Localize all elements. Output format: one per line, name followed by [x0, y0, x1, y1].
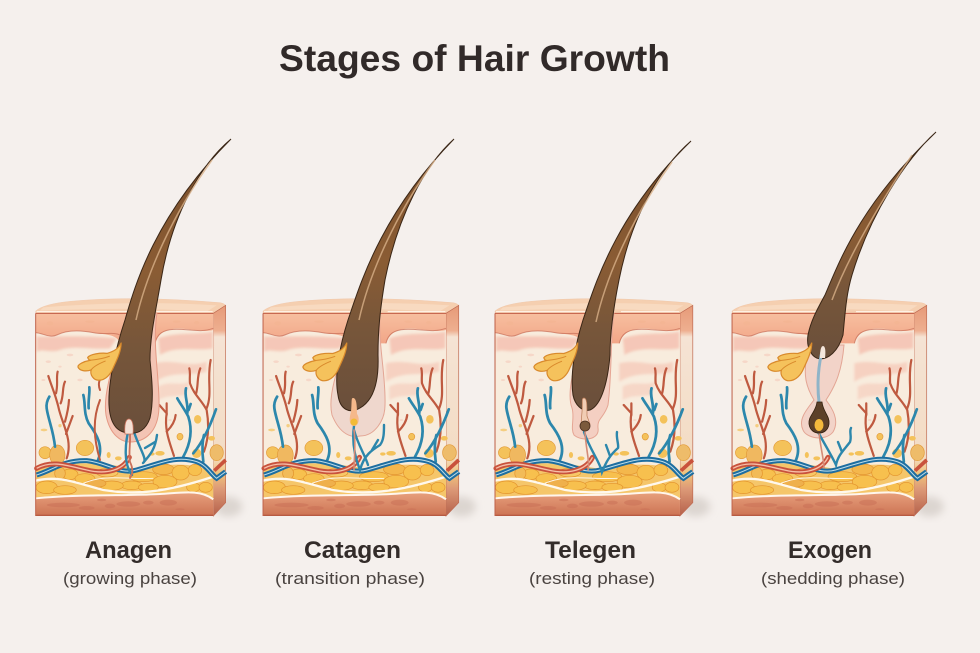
thread notch: Exogen: [820, 346, 825, 358]
sebaceous gland: Telegen: [534, 343, 578, 381]
papilla: Catagen: [350, 398, 359, 426]
skin cross-section: Catagen: [263, 299, 476, 517]
hair shaft: Anagen: [109, 139, 231, 433]
label: Catagen: (transition phase): [275, 569, 425, 588]
label: Exogen: (shedding phase): [761, 569, 905, 588]
hair shaft: Catagen: [337, 139, 454, 411]
detached thread: Exogen: [818, 348, 823, 402]
panel: Catagen: [263, 139, 476, 517]
panel: Anagen: [36, 139, 242, 517]
skin cross-section: Telegen: [495, 299, 710, 517]
papilla core: Exogen: [814, 419, 824, 431]
follicle sheath: Exogen: [801, 345, 844, 438]
follicle sheath: Anagen: [105, 313, 159, 442]
label: Telegen: [529, 537, 655, 588]
sebaceous gland: Exogen: [768, 343, 812, 381]
hair shaft: Telegen: [572, 141, 691, 410]
panel: Exogen: [732, 132, 944, 517]
skin cross-section: Exogen: [732, 299, 944, 517]
hair highlight: Telegen: [596, 162, 672, 322]
club hair: Exogen: [809, 402, 829, 433]
title: Stages of Hair Growth: [279, 38, 670, 79]
hair highlight: Exogen: [832, 155, 912, 300]
hair shaft: Exogen: [808, 132, 936, 359]
label: Exogen: [761, 537, 905, 588]
label: Telegen: (resting phase): [529, 569, 655, 588]
club bulb: Telegen: [580, 421, 590, 431]
papilla notch: Anagen: [125, 419, 133, 434]
hair highlight: Anagen: [136, 160, 212, 320]
label: Exogen: Exogen: [788, 537, 872, 564]
label: Catagen: [275, 537, 425, 588]
label: Catagen: Catagen: [304, 537, 401, 564]
follicle sheath: Telegen: [570, 313, 614, 439]
lower vessels: Catagen: [353, 425, 384, 470]
skin cross-section: Anagen: [36, 299, 242, 517]
papilla stalk: Telegen: [581, 398, 590, 424]
label: Anagen: Anagen: [85, 537, 172, 564]
label: Anagen: [63, 537, 197, 588]
lower vessels: Anagen: [95, 365, 157, 478]
label: Telegen: Telegen: [545, 537, 636, 564]
lower vessels: Telegen: [584, 432, 618, 472]
sebaceous gland: Catagen: [303, 343, 347, 381]
lower vessels: Exogen: [818, 428, 851, 468]
panel: Telegen: [495, 141, 710, 517]
papilla core: Catagen: [350, 418, 358, 426]
hair highlight: Catagen: [359, 160, 435, 320]
follicle sheath: Catagen: [331, 313, 385, 437]
sebaceous gland: Anagen: [78, 343, 121, 380]
label: Anagen: (growing phase): [63, 569, 197, 588]
